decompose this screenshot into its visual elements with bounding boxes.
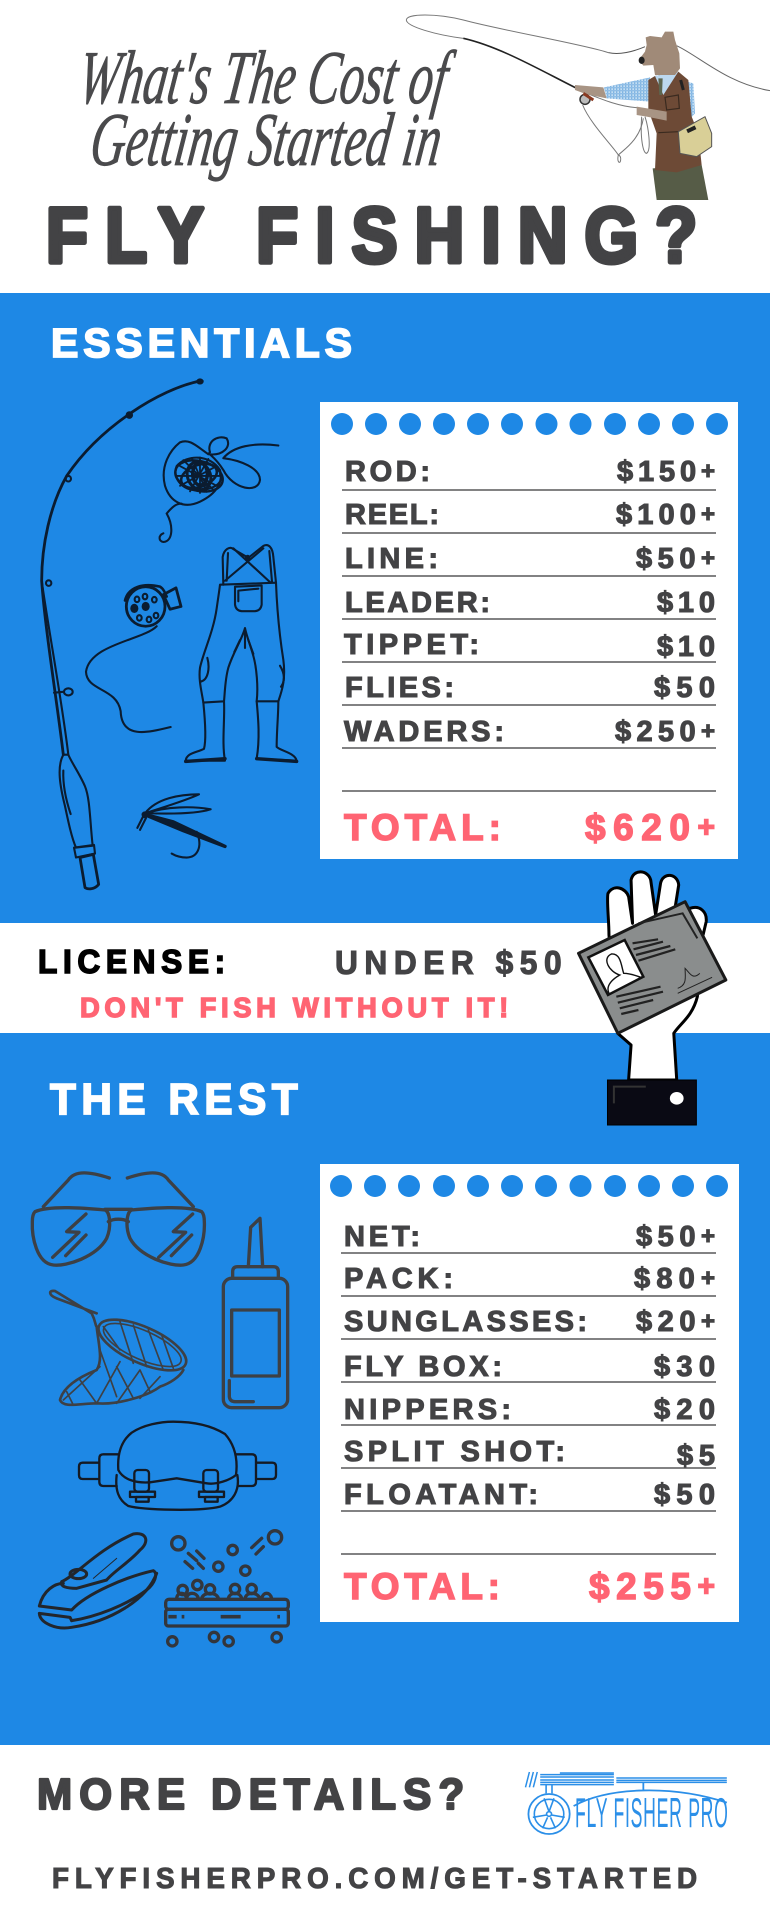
license card: [579, 902, 726, 1033]
panel: the rest price list: [320, 1164, 739, 1622]
total: TOTAL:: [344, 1566, 500, 1607]
row: fly box: FLY BOX:: [344, 1351, 502, 1383]
icon: waders: [186, 545, 297, 761]
row: line: LINE:: [345, 543, 438, 575]
icon: fly reel: [86, 585, 181, 732]
row: flies: FLIES:: [345, 672, 454, 704]
row: nippers: [344, 1394, 715, 1426]
row: reel: +: [701, 501, 715, 528]
band: license: [0, 923, 770, 1033]
reel: [580, 94, 590, 104]
row rules: [341, 1253, 716, 1554]
row rules: [342, 490, 716, 791]
notepad holes: [330, 1175, 728, 1197]
cuff: [607, 1080, 696, 1125]
logo mark: [525, 1772, 727, 1834]
bag latch: [686, 126, 696, 133]
head: [639, 32, 680, 75]
row: waders: WADERS:: [344, 716, 504, 748]
row: tippet: $10: [657, 631, 715, 663]
row: rod: +: [701, 458, 715, 485]
total: TOTAL:: [344, 807, 501, 848]
panel: essentials price list: [320, 402, 738, 859]
license price: UNDER $50: [335, 944, 562, 981]
total: $255: [589, 1566, 691, 1607]
logo wordmark: FLY FISHER PRO: [575, 1789, 728, 1836]
footer url: FLYFISHERPRO.COM/GET-STARTED: [52, 1862, 697, 1895]
row: sunglasses: $20: [636, 1306, 695, 1338]
row: pack: [344, 1263, 715, 1295]
row: waders: [344, 716, 715, 748]
row: pack: PACK:: [344, 1263, 453, 1295]
hand: [608, 872, 706, 1080]
row: net: NET:: [344, 1221, 420, 1253]
vest: [648, 72, 702, 172]
sleeve right: [665, 80, 695, 123]
row: sunglasses: SUNGLASSES:: [344, 1306, 587, 1338]
row: pack: +: [701, 1265, 715, 1292]
lower arm: [637, 107, 667, 121]
creel bag: [678, 117, 712, 157]
total: [344, 1566, 715, 1607]
row: leader: $10: [657, 587, 715, 619]
icon: fly: [137, 794, 225, 858]
row: nippers: $20: [654, 1394, 715, 1426]
band background: [0, 923, 770, 1033]
total: +: [697, 811, 715, 844]
icon: floatant bottle: [223, 1218, 288, 1408]
shirt and tie: [655, 72, 678, 95]
card background: [320, 402, 738, 859]
nose: [639, 57, 645, 64]
license reminder: DON'T FISH WITHOUT IT!: [80, 992, 508, 1023]
row: net: [344, 1221, 715, 1253]
fly line and rod: [406, 15, 770, 162]
panel: blue background: [0, 293, 770, 1745]
heading: essentials: ESSENTIALS: [51, 320, 352, 366]
icons: essentials gear: [42, 379, 297, 889]
icon: tangled line: [160, 437, 278, 542]
row: waders: +: [701, 718, 715, 745]
script heading line 2: Getting Started in: [86, 97, 448, 182]
icon: nippers: [39, 1534, 157, 1628]
row: leader: [345, 587, 715, 619]
sleeve left: [604, 77, 650, 102]
row: flies: [345, 672, 715, 704]
illustration: bear fly fisherman: [406, 15, 770, 200]
row: waders: $250: [615, 716, 696, 748]
row: pack: $80: [634, 1263, 695, 1295]
vest pocket and belt: [658, 95, 679, 133]
row: net: $50: [636, 1221, 695, 1253]
row: rod: $150: [617, 456, 696, 488]
bag strap: [681, 80, 683, 90]
row: split shot: $5: [677, 1440, 715, 1472]
row: reel: REEL:: [345, 499, 439, 531]
logo: fly fisher pro: [525, 1772, 728, 1836]
title: what's the cost: [74, 35, 460, 182]
row: fly box: $30: [654, 1351, 715, 1383]
row: sunglasses: [344, 1306, 715, 1338]
row: nippers: NIPPERS:: [344, 1394, 511, 1426]
forearm and hands: [575, 85, 607, 98]
total: $620: [585, 807, 690, 848]
row: tippet: [344, 629, 715, 663]
row: flies: $50: [654, 672, 715, 704]
cuff button: [670, 1092, 684, 1105]
heading: the rest: THE REST: [50, 1075, 298, 1124]
row: line: $50: [636, 543, 695, 575]
notepad holes: [331, 413, 728, 435]
reel seat: [583, 93, 593, 100]
row: reel: $100: [616, 499, 696, 531]
row: rod: [345, 456, 715, 488]
row: line: [345, 543, 715, 575]
total: +: [697, 1570, 715, 1603]
row: leader: LEADER:: [345, 587, 490, 619]
card background: [320, 1164, 739, 1622]
row: split shot: SPLIT SHOT:: [344, 1436, 565, 1468]
row: rod: ROD:: [345, 456, 430, 488]
footer heading: MORE DETAILS?: [37, 1770, 464, 1819]
row: floatant: $50: [654, 1479, 715, 1511]
icon: landing net: [50, 1291, 193, 1405]
row: split shot: [344, 1436, 715, 1472]
icon: hip pack: [79, 1422, 276, 1510]
row: floatant: FLOATANT:: [344, 1479, 538, 1511]
row: floatant: [344, 1479, 715, 1511]
cuff detail: [614, 1087, 646, 1103]
license label: LICENSE:: [38, 943, 225, 980]
row: fly box: [344, 1351, 715, 1383]
pants: [653, 165, 708, 200]
title: fly fishing: FLY FISHING?: [46, 191, 697, 279]
icon: hand holding license: [579, 872, 726, 1125]
icons: the rest gear: [32, 1173, 288, 1646]
icon: split shot: [166, 1531, 288, 1646]
icon: sunglasses: [32, 1173, 204, 1265]
row: line: +: [701, 545, 715, 572]
row: reel: [345, 499, 715, 531]
tie: [658, 78, 663, 95]
row: sunglasses: +: [701, 1308, 715, 1335]
row: tippet: TIPPET:: [344, 629, 479, 661]
total: [344, 807, 715, 848]
script heading line 1: What's The Cost of: [74, 35, 460, 120]
icon: fly rod: [42, 379, 203, 889]
row: net: +: [701, 1223, 715, 1250]
